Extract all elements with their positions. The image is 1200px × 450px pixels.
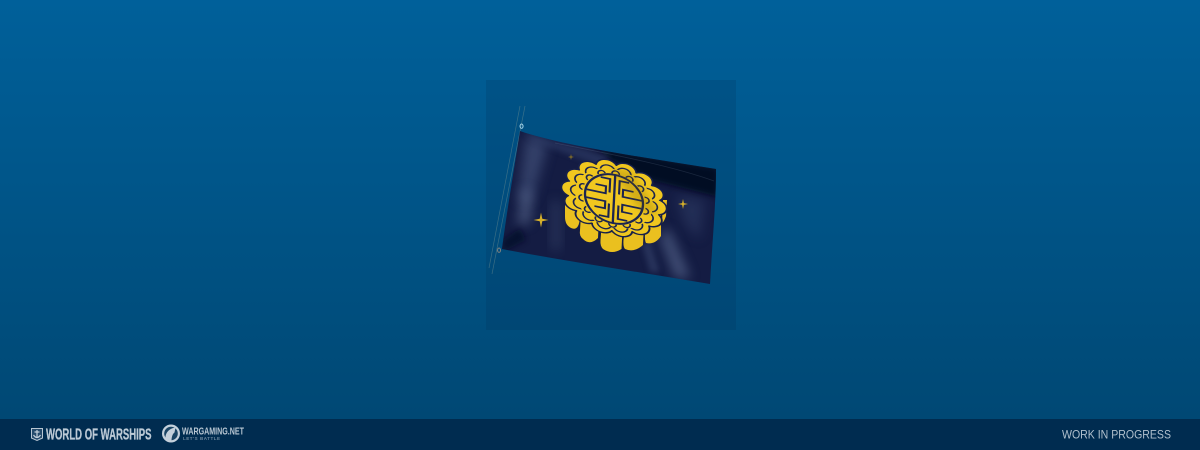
star right bbox=[678, 199, 688, 209]
flag bbox=[502, 131, 716, 284]
star left bbox=[534, 212, 548, 228]
World of Warships logo bbox=[32, 426, 152, 444]
mooncake emblem bbox=[565, 156, 667, 252]
mooncake outer scallops bbox=[566, 156, 662, 240]
mooncake side pieces bbox=[565, 200, 667, 252]
star top bbox=[568, 154, 574, 160]
longevity symbol medallion bbox=[584, 169, 644, 229]
flag folds bbox=[503, 133, 718, 278]
fold sheen line bbox=[555, 143, 714, 181]
image panel bbox=[486, 80, 736, 330]
work in progress label: WORK IN PROGRESS bbox=[1062, 428, 1171, 442]
icon: wargaming circle bbox=[162, 424, 180, 442]
mooncake middle scallop line bbox=[573, 161, 655, 236]
flag cloth bbox=[502, 131, 716, 284]
emblem fold shadow bbox=[610, 168, 660, 215]
icon: ship shield bbox=[32, 428, 42, 440]
tagline: LET'S BATTLE bbox=[183, 436, 220, 441]
Wargaming.net wordmark: WARGAMING.NET bbox=[182, 426, 244, 438]
mooncake inner wave line bbox=[581, 167, 647, 231]
Wargaming.net logo bbox=[162, 424, 244, 442]
footer bar bbox=[0, 419, 1200, 450]
flagpole bbox=[489, 106, 525, 274]
World of Warships wordmark: WORLD OF WARSHIPS bbox=[46, 426, 152, 444]
